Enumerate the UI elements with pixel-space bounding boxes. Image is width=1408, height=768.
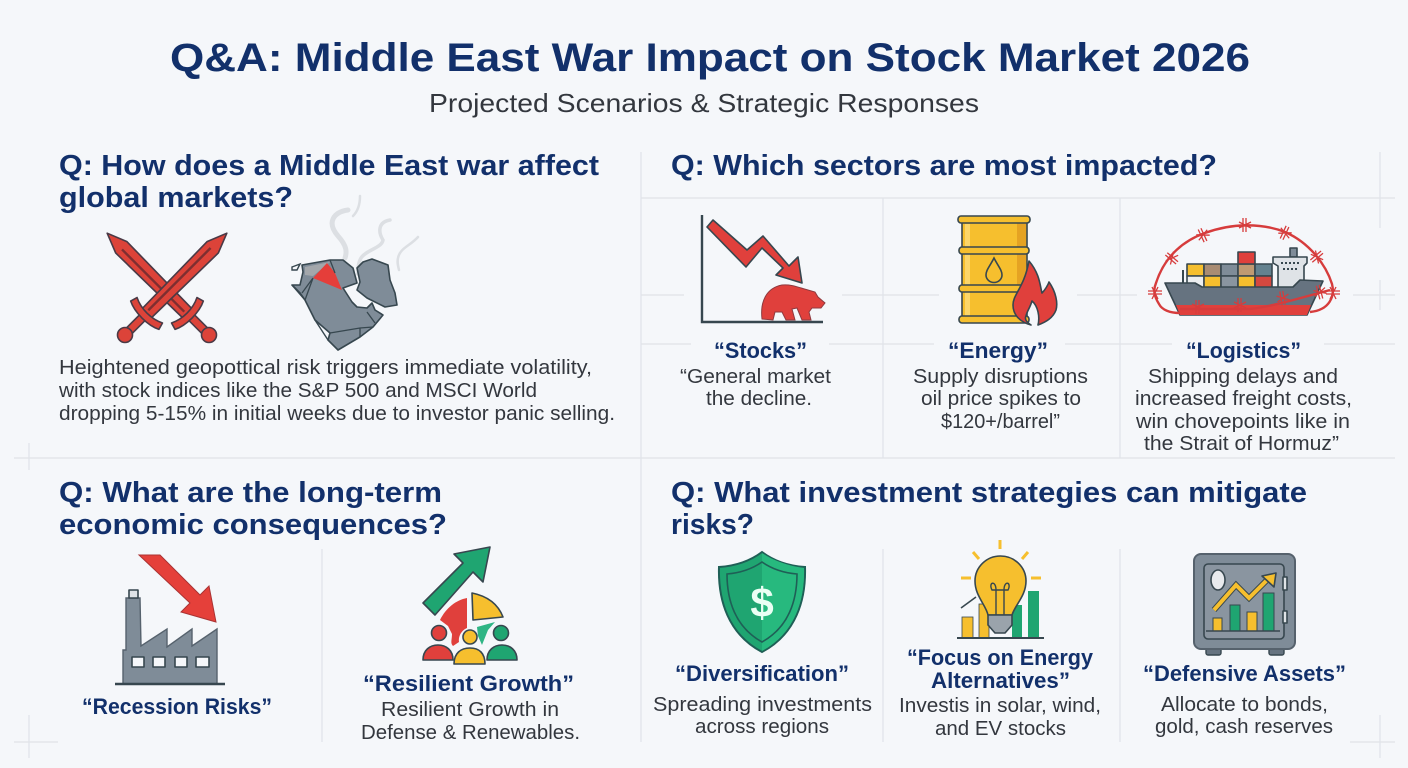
text: diversification description: across regions [695,716,829,738]
text: logistics description: the Strait of Hormuz” [1144,433,1339,455]
text: global markets answer: Heightened geopottical risk triggers immediate volatility, [59,357,592,379]
text: stocks description: “General market [680,366,831,388]
heading: strategies question [671,477,1307,541]
icon: falling chart with bear [702,215,825,322]
heading: sectors question: Q: Which sectors are most impacted? [671,150,1217,182]
icon: safe with growth chart [1194,554,1295,655]
text: logistics description [1135,366,1352,455]
heading: global markets question: global markets? [59,182,293,214]
heading: global markets question [59,150,599,214]
icon: growth arrow with people [423,547,517,664]
text: diversification description [653,694,872,738]
label: focus on energy alternatives [907,645,1094,693]
subtitle: Projected Scenarios & Strategic Responses [429,88,979,118]
icon: factory with falling arrow [115,555,225,684]
text: logistics description: win chovepoints like in [1135,411,1350,433]
label: focus on energy alternatives: “Focus on Energy [907,645,1094,670]
text: stocks description [680,366,831,410]
text: global markets answer [58,357,615,425]
label: resilient growth: “Resilient Growth” [363,671,574,696]
text: defensive assets description [1155,694,1333,738]
heading: strategies question: risks? [671,509,754,541]
heading: long-term question: economic consequences? [59,509,447,541]
text: stocks description: the decline. [706,388,812,410]
text: resilient growth description [361,699,580,744]
heading: long-term question [59,477,447,541]
icon: dollar shield [719,552,805,652]
label: energy: “Energy” [948,338,1048,363]
icon: smoking Middle East map [292,196,418,350]
heading: long-term question: Q: What are the long-term [59,477,442,509]
text: energy alternatives description: Investis in solar, wind, [899,695,1101,717]
text: defensive assets description: gold, cash reserves [1155,716,1333,738]
label: logistics: “Logistics” [1186,338,1301,363]
heading: global markets question: Q: How does a Middle East war affect [59,150,599,182]
text: defensive assets description: Allocate to bonds, [1161,694,1328,716]
panel: global markets [58,150,615,425]
text: energy description [913,366,1088,433]
icon: container ship with barbed wire [1148,218,1340,315]
text: resilient growth description: Defense & Renewables. [361,722,580,744]
text: energy description: $120+/barrel” [941,411,1060,433]
icon: oil barrel with flame [958,216,1057,325]
panel: investment strategies [653,477,1346,740]
icon: dollar shield: $ [750,579,774,626]
text: energy alternatives description: and EV stocks [935,718,1066,740]
text: global markets answer: dropping 5-15% in initial weeks due to investor panic selling. [59,403,615,425]
text: resilient growth description: Resilient Growth in [381,699,559,721]
text: logistics description: Shipping delays and [1148,366,1338,388]
heading: strategies question: Q: What investment strategies can mitigate [671,477,1307,509]
text: diversification description: Spreading investments [653,694,872,716]
icon: light bulb with bars [957,540,1044,638]
title: Q&A: Middle East War Impact on Stock Market 2026 [170,36,1250,80]
icon: crossed swords [93,219,241,354]
text: energy description: Supply disruptions [913,366,1088,388]
text: logistics description: increased freight costs, [1135,388,1352,410]
label: defensive assets: “Defensive Assets” [1143,661,1346,686]
text: energy alternatives description [899,695,1101,740]
panel: impacted sectors [671,150,1352,455]
text: global markets answer: with stock indices like the S&P 500 and MSCI World [58,380,537,402]
label: diversification: “Diversification” [675,661,849,686]
text: energy description: oil price spikes to [921,388,1081,410]
panel: long-term consequences [59,477,580,744]
label: stocks: “Stocks” [714,338,807,363]
label: focus on energy alternatives: Alternatives” [931,668,1070,693]
label: recession risks: “Recession Risks” [82,694,272,719]
